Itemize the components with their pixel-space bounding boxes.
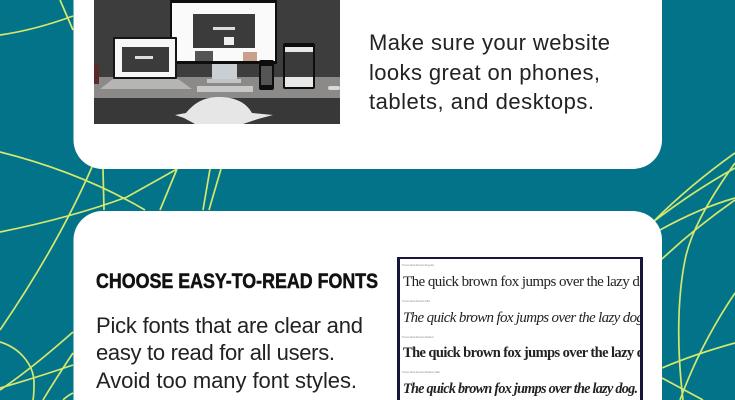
laptop [113, 37, 177, 79]
image: font specimen sheet: Times New Roman Regular [402, 263, 434, 267]
text: fonts description [96, 313, 363, 393]
image: font specimen sheet: Times New Roman Italic [402, 299, 431, 303]
cup [94, 65, 99, 84]
image: font specimen sheet [397, 257, 661, 400]
monitor [170, 0, 277, 64]
image: font specimen sheet: The quick brown fox jumps over the lazy dog. [403, 310, 647, 326]
mouse [328, 86, 340, 90]
image: font specimen sheet: Times New Roman Medium [402, 335, 434, 339]
image: font specimen sheet: The quick brown fox jumps over the lazy dog. [403, 381, 638, 397]
image: font specimen sheet: The quick brown fox jumps over the lazy dog. [403, 274, 657, 290]
heading: CHOOSE EASY-TO-READ FONTS [96, 270, 378, 293]
image: font specimen sheet: The quick brown fox jumps over the lazy dog. [403, 345, 661, 361]
text: fonts description: Pick fonts that are clear and [96, 313, 363, 338]
phone [259, 60, 274, 90]
text: responsive design description: looks great on phones, [369, 60, 600, 85]
text: responsive design description: tablets, and desktops. [369, 89, 594, 114]
text: fonts description: Avoid too many font styles. [96, 368, 357, 393]
tablet [283, 43, 315, 89]
text: responsive design description: Make sure your website [369, 30, 610, 55]
text: fonts description: easy to read for all users. [96, 340, 335, 365]
keyboard [197, 86, 253, 92]
panel: easy-to-read fonts card [74, 211, 662, 400]
image: devices on a desk [94, 0, 340, 124]
chair [175, 97, 273, 124]
panel: responsive design card [74, 0, 662, 169]
image: font specimen sheet: Times New Roman Medium Italic [402, 370, 441, 374]
text: responsive design description [369, 30, 610, 114]
